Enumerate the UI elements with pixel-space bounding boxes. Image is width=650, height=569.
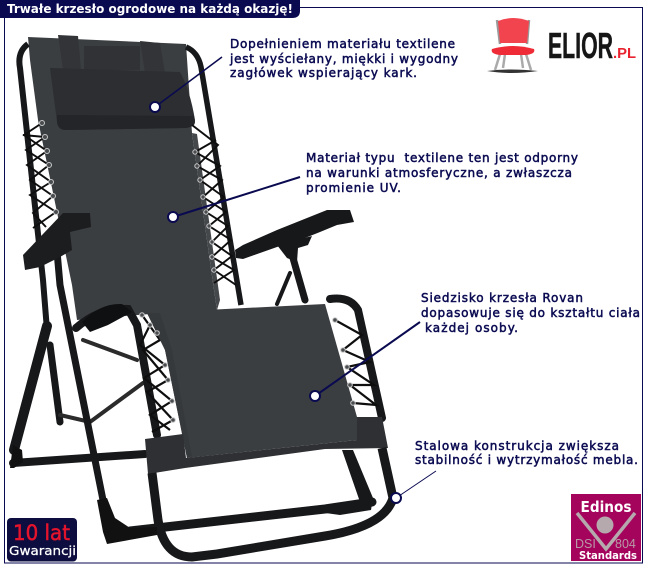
callout: textilene material: na warunki atmosferyczne, a zwłaszcza [306, 166, 572, 180]
icon: red chair [487, 18, 538, 73]
badge: Edinos DSI 804 Standards: 804 [615, 537, 636, 551]
callout: headrest: zagłówek wspierający kark. [230, 66, 417, 80]
back frame tubes [19, 44, 241, 505]
badge: Edinos DSI 804 Standards [571, 494, 641, 562]
callout: steel frame: Stalowa konstrukcja zwiększa [415, 439, 619, 453]
front frame tube [152, 448, 393, 557]
headrest and straps [50, 35, 195, 130]
callout: textilene material [168, 151, 578, 222]
backrest fabric [28, 37, 217, 320]
badge: Edinos DSI 804 Standards: Standards [579, 549, 637, 562]
callout: seat: dopasowuje się do kształtu ciała [421, 306, 640, 320]
callout: steel frame [391, 439, 638, 503]
side lacing on backrest [23, 123, 236, 285]
seat fabric [147, 304, 357, 458]
callout: seat [310, 291, 640, 401]
callout: headrest [150, 37, 458, 112]
title banner: Trwałe krzesło ogrodowe na każdą okazję! [7, 1, 293, 16]
badge: Edinos DSI 804 Standards: DSI [575, 537, 596, 551]
seat footrest band [145, 417, 388, 474]
callout: seat: każdej osoby. [425, 321, 518, 335]
callout: headrest: jest wyściełany, miękki i wygodny [229, 52, 458, 66]
badge: 10 lat gwarancji: 10 lat [13, 521, 70, 545]
logo: Elior.pl [487, 18, 636, 73]
callout: headrest: Dopełnieniem materiału textilene [230, 37, 455, 51]
rear front foot [97, 498, 157, 544]
badge: 10 lat gwarancji: Gwarancji [9, 544, 76, 558]
seat tubes and lacing [76, 298, 382, 435]
rear legs and struts [13, 258, 372, 531]
rear left foot [10, 445, 23, 468]
badge: Edinos DSI 804 Standards: Edinos [580, 498, 632, 516]
grommets on backrest [40, 120, 216, 272]
callout: textilene material: promienie UV. [306, 181, 401, 195]
left armrest [23, 213, 91, 270]
rear right foot [318, 450, 373, 515]
grommets on seat [140, 313, 355, 422]
product photo: reclining garden chair [10, 35, 393, 557]
callout: textilene material: Materiał typu textilene ten jest odporny [306, 151, 578, 165]
badge: 10 lat gwarancji [7, 518, 77, 562]
right armrest [235, 210, 354, 259]
callout: steel frame: stabilność i wytrzymałość mebla. [415, 453, 638, 467]
callout: seat: Siedzisko krzesła Rovan [421, 291, 583, 305]
logo: Elior.pl: .PL [613, 45, 636, 62]
